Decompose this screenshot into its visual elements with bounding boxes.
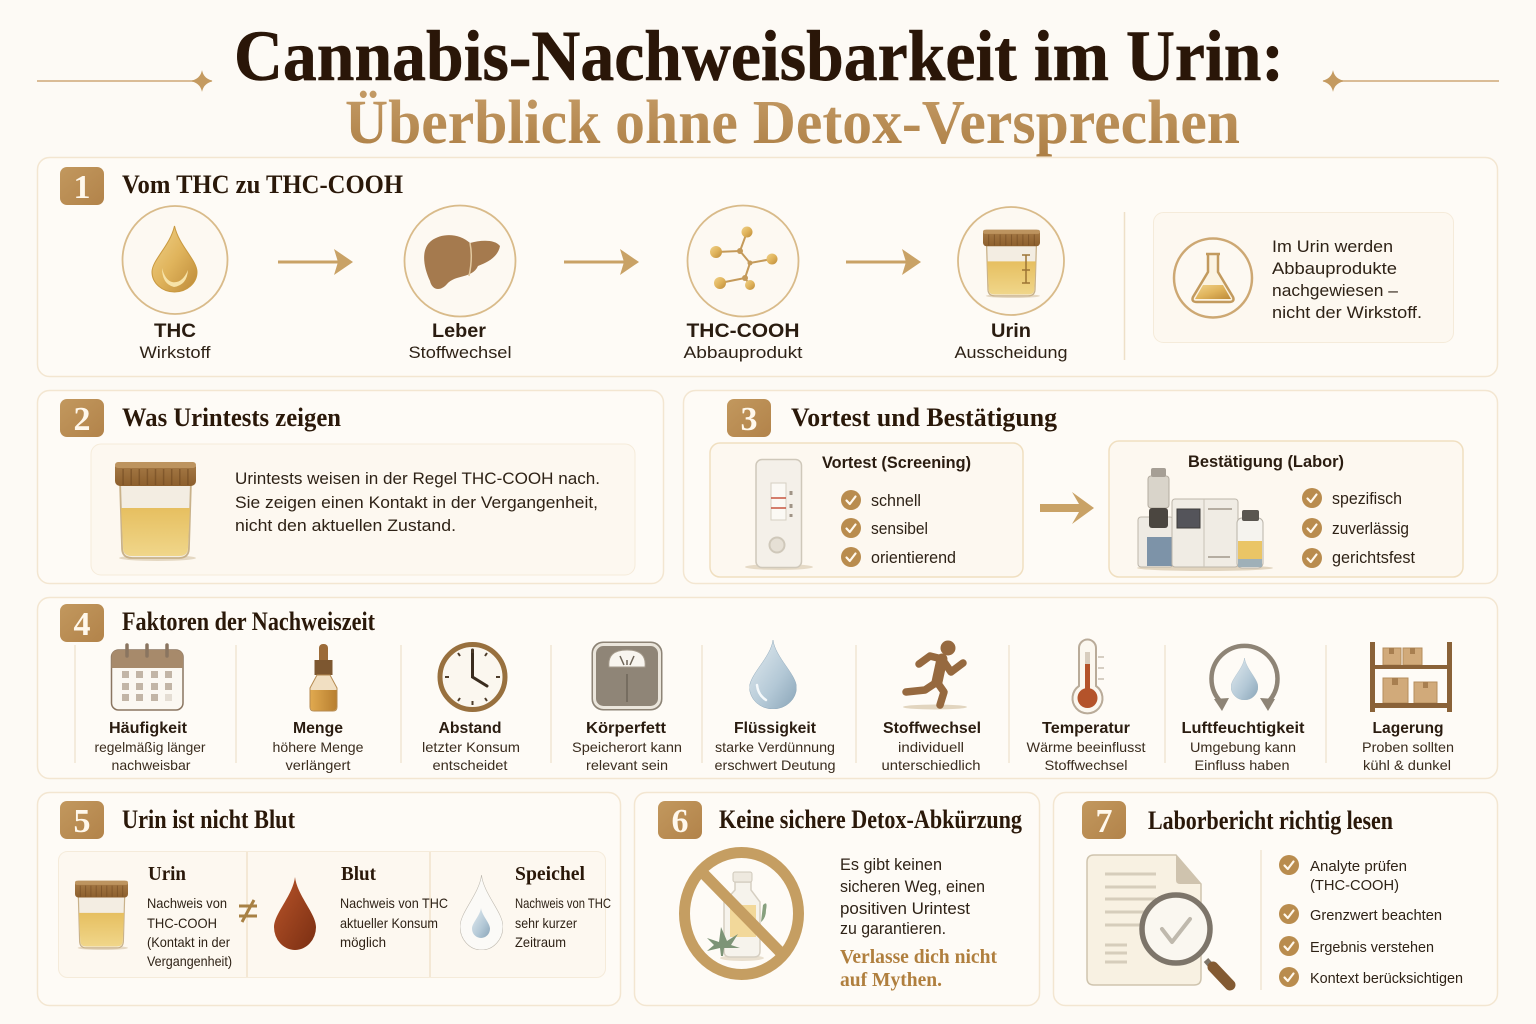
label Urin	[954, 321, 1068, 362]
factor: Luftfeuchtigkeit: Einfluss haben	[1194, 757, 1290, 773]
note text: nicht der Wirkstoff.	[1272, 303, 1422, 322]
factor: Menge	[272, 644, 364, 773]
label Leber: Stoffwechsel	[408, 343, 512, 362]
label Leber: Leber	[432, 321, 487, 342]
column: Speichel: Zeitraum	[515, 934, 566, 950]
icon: crossed-out detox bottle	[684, 852, 798, 974]
factor: Häufigkeit	[94, 645, 206, 773]
text: zu garantieren.	[840, 919, 946, 938]
factor: Lagerung: Lagerung	[1372, 720, 1444, 737]
column: Urin: Nachweis von	[147, 895, 227, 911]
checklist	[1302, 488, 1415, 568]
column: Urin: THC-COOH	[147, 915, 217, 931]
checklist: Kontext berücksichtigen	[1310, 970, 1463, 987]
heading 5: Urin ist nicht Blut	[122, 805, 295, 834]
arrow	[1040, 492, 1094, 524]
factor: Häufigkeit: Häufigkeit	[109, 720, 188, 737]
checklist	[841, 490, 956, 567]
heading 6: Keine sichere Detox-Abkürzung	[719, 805, 1022, 834]
ornament: right line	[1323, 72, 1499, 90]
icon: report with magnifier	[1087, 855, 1230, 985]
factor: Temperatur: Stoffwechsel	[1044, 757, 1128, 773]
checklist: schnell	[871, 491, 921, 510]
panel: step 5 urine vs blood	[38, 792, 620, 1006]
label Urin: Urin	[991, 321, 1031, 342]
column: Blut: Blut	[341, 863, 376, 885]
factor: Menge: verlängert	[286, 757, 351, 773]
panel: step 2 urine tests	[38, 390, 664, 584]
factor: Flüssigkeit: erschwert Deutung	[714, 757, 836, 773]
label Urin: Ausscheidung	[954, 343, 1068, 362]
subtitle: Überblick ohne Detox-Versprechen	[345, 89, 1240, 157]
warning text: auf Mythen.	[840, 969, 942, 991]
icon: urine cup large	[115, 462, 196, 561]
panel: step 3 screening and confirmation	[684, 390, 1498, 584]
factor: Stoffwechsel	[882, 640, 981, 773]
factor: Lagerung: kühl & dunkel	[1363, 757, 1451, 773]
label THC: Wirkstoff	[140, 343, 211, 362]
checklist: Analyte prüfen	[1310, 858, 1407, 875]
column: Blut: aktueller Konsum	[340, 915, 438, 931]
factor: Körperfett: Speicherort kann	[572, 739, 682, 755]
note text: Im Urin werden	[1272, 237, 1393, 256]
ornament: left line	[37, 72, 212, 90]
factor: Stoffwechsel: unterschiedlich	[882, 757, 980, 773]
icon: THC drop	[122, 206, 228, 314]
factor: Luftfeuchtigkeit: Luftfeuchtigkeit	[1182, 720, 1305, 737]
icon: flask	[1174, 238, 1252, 318]
badge 3: 3	[740, 401, 758, 438]
heading 7: Laborbericht richtig lesen	[1148, 806, 1393, 835]
column: Speichel: sehr kurzer	[515, 915, 577, 931]
column: Blut: möglich	[340, 934, 386, 950]
column: Speichel: Nachweis von THC	[515, 895, 611, 911]
factor: Stoffwechsel: Stoffwechsel	[883, 720, 981, 737]
factor: Temperatur: Temperatur	[1042, 720, 1130, 737]
note text: nachgewiesen –	[1272, 281, 1399, 300]
note text: Abbauprodukte	[1272, 259, 1397, 278]
badge 2: 2	[74, 401, 90, 438]
note text	[1272, 237, 1422, 322]
column: Blut: Nachweis von THC	[340, 895, 448, 911]
factor: Häufigkeit: regelmäßig länger	[94, 739, 206, 755]
card title: Vortest (Screening)	[822, 453, 971, 472]
badge 4	[60, 604, 104, 643]
label THC-COOH: THC-COOH	[686, 321, 800, 342]
icon: molecule	[688, 206, 798, 316]
factor: Flüssigkeit	[714, 640, 836, 773]
factor: Luftfeuchtigkeit	[1182, 646, 1305, 773]
text: Urintests weisen in der Regel THC-COOH nach.	[235, 469, 600, 488]
card: confirmation	[1109, 441, 1463, 577]
badge 7	[1082, 801, 1126, 840]
column: Speichel	[460, 863, 611, 950]
checklist	[1279, 855, 1463, 987]
checklist: spezifisch	[1332, 489, 1402, 508]
text: positiven Urintest	[840, 899, 970, 918]
label THC-COOH	[684, 321, 803, 362]
factor: Abstand: letzter Konsum	[422, 739, 520, 755]
column: Urin: (Kontakt in der	[147, 934, 230, 950]
heading 1: Vom THC zu THC-COOH	[122, 170, 403, 199]
heading 2: Was Urintests zeigen	[122, 403, 341, 432]
column: Urin: Vergangenheit)	[147, 953, 232, 969]
label THC: THC	[154, 321, 196, 342]
icon: liver	[404, 206, 516, 316]
factor: Temperatur	[1026, 640, 1146, 773]
badge 5	[60, 801, 104, 840]
column: Urin: Urin	[148, 863, 186, 885]
factor: Häufigkeit: nachweisbar	[112, 757, 191, 773]
factor: Abstand: Abstand	[438, 720, 502, 737]
factor: Körperfett: Körperfett	[586, 720, 667, 737]
badge 7: 7	[1096, 803, 1112, 840]
column: Urin	[75, 863, 232, 969]
arrow 1	[278, 249, 353, 275]
factor: Temperatur: Wärme beeinflusst	[1026, 739, 1146, 755]
factor: Körperfett: relevant sein	[586, 757, 668, 773]
label THC-COOH: Abbauprodukt	[684, 343, 803, 362]
panel: step 4 factors	[38, 598, 1498, 778]
heading 4: Faktoren der Nachweiszeit	[122, 607, 375, 636]
factor: Abstand: entscheidet	[432, 757, 508, 773]
factor: Menge: höhere Menge	[272, 739, 364, 755]
factor: Lagerung	[1362, 642, 1454, 773]
factor: Flüssigkeit: Flüssigkeit	[734, 720, 817, 737]
checklist: (THC-COOH)	[1310, 877, 1399, 894]
badge 5: 5	[74, 803, 90, 840]
badge 1: 1	[74, 169, 90, 206]
title: Cannabis-Nachweisbarkeit im Urin:	[234, 16, 1284, 96]
factor: Lagerung: Proben sollten	[1362, 739, 1454, 755]
card: screening	[710, 443, 1023, 577]
callout: note	[1154, 212, 1454, 342]
warning text: Verlasse dich nicht	[840, 946, 997, 968]
badge 6	[658, 801, 702, 840]
badge 4: 4	[74, 606, 90, 643]
heading 3: Vortest und Bestätigung	[791, 403, 1057, 432]
label THC	[140, 321, 211, 362]
checklist: sensibel	[871, 519, 928, 538]
not-equal sign	[239, 900, 257, 922]
column: Speichel: Speichel	[515, 863, 585, 885]
warning text	[840, 946, 997, 991]
badge 2	[60, 399, 104, 438]
factor: Luftfeuchtigkeit: Umgebung kann	[1190, 739, 1296, 755]
text	[840, 855, 985, 938]
badge 1	[60, 167, 104, 206]
inner box	[91, 444, 635, 575]
factor: Stoffwechsel: individuell	[898, 739, 964, 755]
text	[235, 469, 600, 535]
checklist: Ergebnis verstehen	[1310, 939, 1434, 956]
factor: Menge: Menge	[293, 720, 343, 737]
card title: Bestätigung (Labor)	[1188, 452, 1344, 471]
arrow 3	[846, 249, 921, 275]
arrow 2	[564, 249, 639, 275]
text: nicht den aktuellen Zustand.	[235, 516, 456, 535]
icon: lab instrument	[1137, 468, 1273, 571]
text: sicheren Weg, einen	[840, 877, 985, 896]
factor: Abstand	[422, 644, 520, 773]
badge 3	[727, 399, 771, 438]
checklist: zuverlässig	[1332, 519, 1409, 538]
label Leber	[408, 321, 512, 362]
text: Sie zeigen einen Kontakt in der Vergangenheit,	[235, 493, 598, 512]
panel: step 7 lab report	[1054, 792, 1498, 1006]
icon: urine cup	[958, 207, 1064, 315]
checklist: gerichtsfest	[1332, 548, 1415, 567]
checklist: Grenzwert beachten	[1310, 907, 1442, 924]
panel: step 1 THC to THC-COOH	[38, 158, 1498, 376]
badge 6: 6	[672, 803, 688, 840]
checklist: orientierend	[871, 548, 956, 567]
panel: step 6 no detox shortcut	[634, 792, 1040, 1006]
column: Blut	[274, 863, 448, 950]
text: Es gibt keinen	[840, 855, 942, 874]
icon: test cassette	[745, 460, 813, 570]
factor: Körperfett	[572, 642, 682, 773]
factor: Flüssigkeit: starke Verdünnung	[715, 739, 835, 755]
comparison box	[58, 852, 611, 978]
